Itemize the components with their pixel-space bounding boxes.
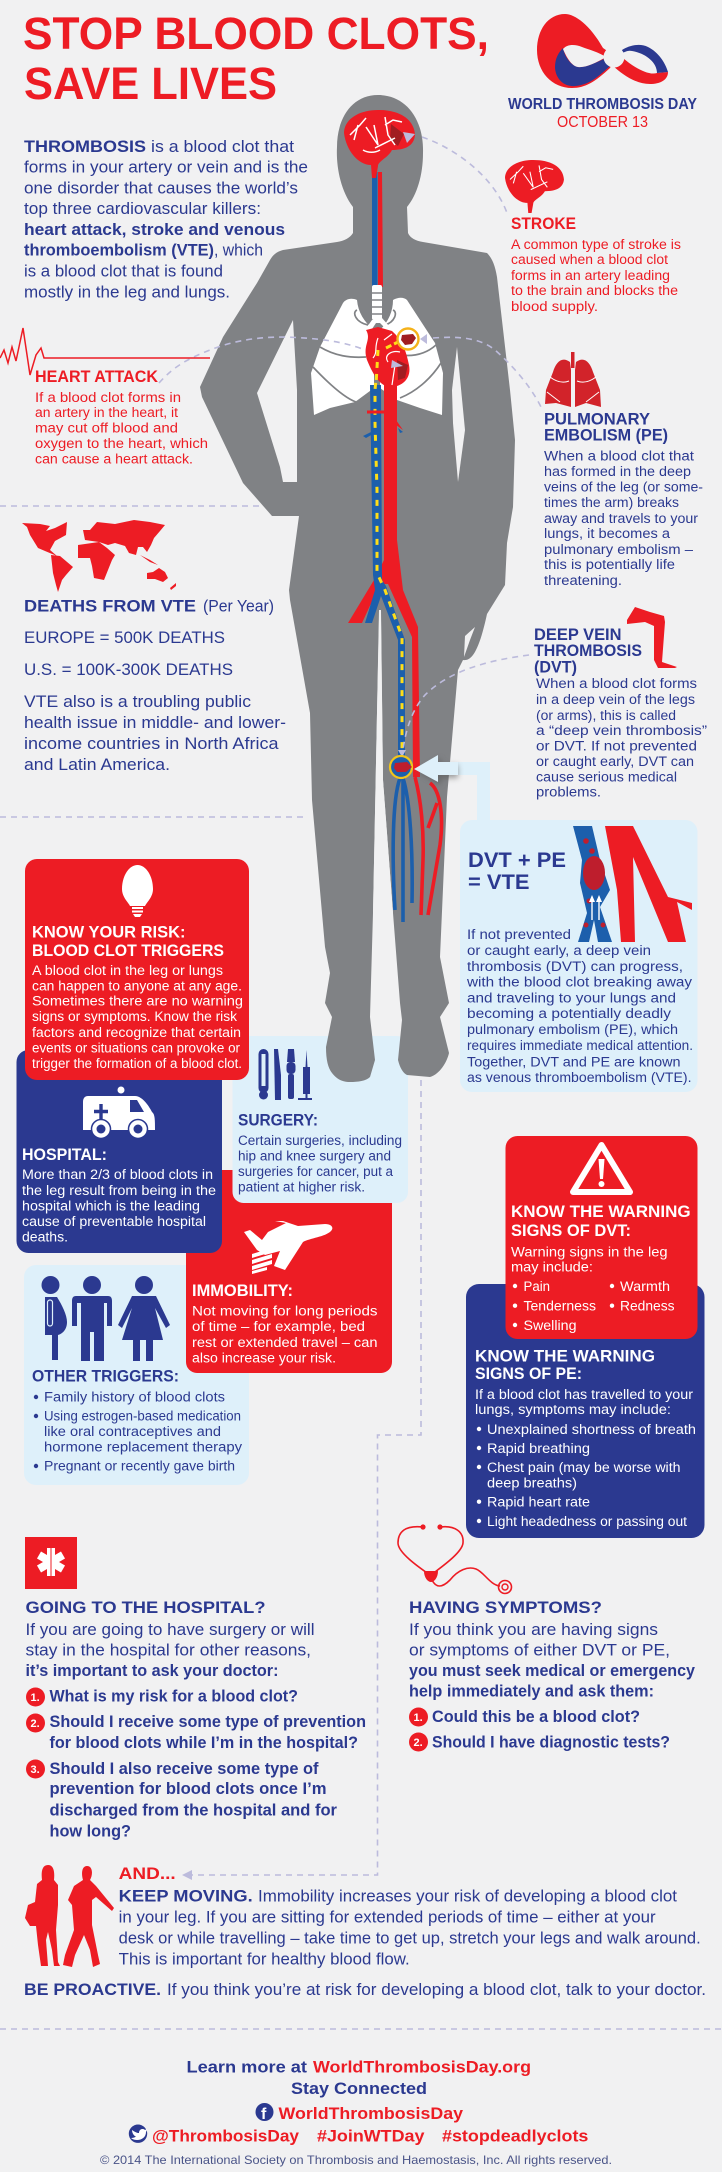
thrombosis intro text: forms in your artery or vein and is the: [24, 159, 308, 177]
having symptoms text: [409, 1599, 696, 1752]
going to the hospital text: stay in the hospital for other reasons,: [26, 1642, 311, 1660]
lungs: [311, 298, 443, 415]
vein and artery illustration: [573, 826, 692, 942]
panel: DVT + PE = VTE: becoming a potentially deadly: [467, 1006, 672, 1022]
thrombosis intro text: mostly in the leg and lungs.: [24, 283, 230, 301]
panel: surgery: Certain surgeries, including: [238, 1133, 402, 1149]
trachea: [367, 285, 389, 329]
stroke text: forms in an artery leading: [511, 268, 670, 284]
icon: stethoscope: [398, 1524, 512, 1594]
symptom questions: Could this be a blood clot?: [432, 1708, 640, 1726]
icon: airplane: [244, 1221, 332, 1274]
going to the hospital text: GOING TO THE HOSPITAL?: [26, 1599, 266, 1617]
panel: DVT + PE = VTE: [414, 755, 698, 1092]
icon: surgical tools: [258, 1049, 312, 1100]
icon: facebook: f: [261, 2106, 267, 2123]
stroke text: blood supply.: [511, 299, 598, 315]
panel: warning signs of PE: deep breaths): [487, 1476, 577, 1492]
panel: warning signs of PE: [466, 1284, 704, 1538]
panel: DVT + PE = VTE: as venous thromboembolism (VTE).: [467, 1070, 692, 1086]
symptom questions: Should I have diagnostic tests?: [432, 1734, 670, 1752]
heart: [366, 327, 409, 387]
thrombosis intro text: THROMBOSIS: [24, 138, 146, 156]
panel: surgery: surgeries for cancer, put a: [238, 1164, 393, 1180]
heart attack text: can cause a heart attack.: [35, 452, 193, 468]
pulmonary embolism text: threatening.: [544, 573, 622, 589]
keep moving text: AND...: [119, 1865, 176, 1883]
question list: for blood clots while I’m in the hospital?: [50, 1734, 358, 1752]
panel: DVT + PE = VTE: If not prevented: [467, 927, 571, 943]
panel: know your risk: can happen to anyone at any age.: [32, 979, 242, 995]
panel: warning signs of DVT: Tenderness: [524, 1299, 596, 1315]
symptom questions: [409, 1708, 670, 1752]
panel: know your risk: KNOW YOUR RISK:: [32, 924, 186, 942]
footer: [129, 2057, 588, 2146]
stroke text: [511, 215, 681, 315]
icon: lungs: [545, 352, 601, 407]
deaths from VTE text: income countries in North Africa: [24, 735, 279, 753]
panel: know your risk: A blood clot in the leg or lungs: [32, 963, 223, 979]
icon: medical star: [25, 1537, 77, 1589]
thrombosis intro text: one disorder that causes the world’s: [24, 179, 298, 197]
heart attack text: HEART ATTACK: [35, 368, 158, 386]
panel: know your risk: events or situations can provoke or: [32, 1041, 240, 1057]
footer: @ThrombosisDay: [152, 2127, 300, 2146]
panel: warning signs of DVT: Swelling: [524, 1318, 576, 1334]
deep vein thrombosis text: problems.: [536, 785, 601, 801]
icon: world map: [22, 520, 176, 592]
panel: warning signs of PE: Rapid heart rate: [487, 1495, 590, 1511]
title: SAVE LIVES: [24, 58, 277, 109]
panel: warning signs of PE: If a blood clot has travelled to your: [475, 1387, 693, 1403]
panel: other triggers: like oral contraceptives and: [44, 1424, 221, 1440]
logo: World Thrombosis Day: OCTOBER 13: [557, 114, 648, 131]
panel: warning signs of DVT: SIGNS OF DVT:: [511, 1222, 631, 1240]
pulmonary embolism text: lungs, it becomes a: [544, 526, 670, 542]
deaths from VTE text: EUROPE = 500K DEATHS: [24, 629, 225, 647]
icon: walking people: [25, 1865, 114, 1967]
keep moving text: in your leg. If you are sitting for extended periods of time – either at your: [119, 1909, 656, 1927]
title: STOP BLOOD CLOTS,: [23, 8, 489, 59]
pulmonary embolism text: veins of the leg (or some-: [544, 480, 703, 496]
panel: know your risk: Sometimes there are no warning: [32, 994, 243, 1010]
panel: warning signs of DVT: may include:: [511, 1260, 593, 1276]
deaths from VTE text: health issue in middle- and lower-: [24, 714, 286, 732]
deep vein thrombosis text: DEEP VEIN: [534, 626, 622, 644]
panel: DVT + PE = VTE: = VTE: [468, 870, 530, 894]
panel: know your risk: signs or symptoms. Know the risk: [32, 1009, 238, 1025]
footer: WorldThrombosisDay.org: [313, 2057, 531, 2076]
panel: surgery: hip and knee surgery and: [238, 1149, 391, 1165]
panel: warning signs of PE: KNOW THE WARNING: [475, 1348, 655, 1366]
title: [23, 8, 489, 109]
deep vein thrombosis text: THROMBOSIS: [534, 642, 642, 660]
panel: DVT + PE = VTE: requires immediate medical attention.: [467, 1038, 693, 1054]
going to the hospital text: [26, 1599, 366, 1841]
panel: warning signs of DVT: Redness: [620, 1299, 674, 1315]
heart attack text: [35, 368, 208, 468]
going to the hospital text: it’s important to ask your doctor:: [26, 1662, 278, 1680]
logo: World Thrombosis Day: WORLD THROMBOSIS DAY: [508, 96, 697, 113]
be proactive text: If you think you’re at risk for developing a blood clot, talk to your doctor.: [167, 1981, 706, 1999]
logo: World Thrombosis Day: [508, 14, 697, 131]
question list: how long?: [50, 1823, 131, 1841]
panel: immobility: Not moving for long periods: [192, 1304, 378, 1320]
deaths from VTE text: [24, 598, 286, 774]
panel: DVT + PE = VTE: pulmonary embolism (PE), which: [467, 1022, 678, 1038]
deep vein thrombosis text: (DVT): [534, 659, 577, 677]
deep vein thrombosis text: (or arms), this is called: [536, 708, 676, 724]
thrombosis intro text: is a blood clot that is found: [24, 262, 223, 280]
heart attack text: If a blood clot forms in: [35, 390, 181, 406]
question list: What is my risk for a blood clot?: [50, 1688, 298, 1706]
panel: warning signs of DVT: KNOW THE WARNING: [511, 1203, 691, 1221]
keep moving text: Immobility increases your risk of developing a blood clot: [258, 1888, 677, 1906]
panel: warning signs of PE: Chest pain (may be worse with: [487, 1460, 680, 1476]
symptom questions: 1.: [414, 1712, 423, 1724]
heart attack text: may cut off blood and: [35, 421, 178, 437]
panel: DVT + PE = VTE: DVT + PE: [468, 848, 566, 872]
thrombosis intro text: heart attack, stroke and venous: [24, 221, 285, 239]
panel: hospital: [16, 1050, 222, 1253]
keep moving text: desk or while travelling – take time to get up, stretch your legs and walk around.: [119, 1929, 701, 1947]
icon: stroke brain: [505, 160, 564, 213]
footer: Stay Connected: [291, 2079, 427, 2098]
question list: Should I also receive some type of: [50, 1760, 319, 1778]
panel: surgery: SURGERY:: [238, 1112, 318, 1130]
keep moving text: This is important for healthy blood flow.: [119, 1950, 410, 1968]
having symptoms text: help immediately and ask them:: [409, 1683, 654, 1701]
question list: 2.: [30, 1718, 40, 1730]
arteries and veins: [348, 172, 442, 922]
icon: ECG line: [0, 328, 210, 375]
thrombosis intro text: [24, 138, 308, 301]
thrombosis intro text: , which: [214, 242, 263, 260]
panel: immobility: rest or extended travel – can: [192, 1335, 378, 1351]
question list: prevention for blood clots once I’m: [50, 1780, 326, 1798]
pulmonary embolism text: has formed in the deep: [544, 464, 691, 480]
panel: other triggers: Family history of blood clots: [44, 1390, 225, 1406]
icon: light bulb: [122, 865, 153, 917]
pulmonary embolism text: times the arm) breaks: [544, 495, 679, 511]
panel: warning signs of PE: SIGNS OF PE:: [475, 1365, 582, 1383]
pulmonary embolism text: away and travels to your: [544, 511, 698, 527]
panel: know your risk: [25, 859, 249, 1080]
panel: warning signs of DVT: Warning signs in the leg: [511, 1245, 668, 1261]
deaths from VTE text: DEATHS FROM VTE: [24, 598, 196, 616]
having symptoms text: HAVING SYMPTOMS?: [409, 1599, 602, 1617]
stroke text: A common type of stroke is: [511, 237, 681, 253]
going to the hospital text: If you are going to have surgery or will: [26, 1621, 314, 1639]
thrombosis intro text: is a blood clot that: [151, 138, 294, 156]
deep vein thrombosis text: or DVT. If not prevented: [536, 739, 697, 755]
pulmonary embolism text: PULMONARY: [544, 410, 650, 428]
footer: Learn more at: [186, 2057, 307, 2076]
panel: immobility: of time – for example, bed: [192, 1319, 365, 1335]
thrombosis intro text: top three cardiovascular killers:: [24, 200, 261, 218]
panel: hospital: cause of preventable hospital: [22, 1214, 206, 1230]
deaths from VTE text: U.S. = 100K-300K DEATHS: [24, 661, 233, 679]
question list: discharged from the hospital and for: [50, 1802, 338, 1820]
clot in lung: [398, 328, 427, 350]
heart attack text: oxygen to the heart, which: [35, 436, 208, 452]
footer: #JoinWTDay: [317, 2127, 425, 2146]
icon: facebook: [256, 2103, 274, 2123]
body silhouette: [200, 95, 515, 1082]
pulmonary embolism text: EMBOLISM (PE): [544, 427, 668, 445]
deep vein thrombosis text: cause serious medical: [536, 770, 677, 786]
pulmonary embolism text: this is potentially life: [544, 557, 675, 573]
thrombosis intro text: thromboembolism (VTE): [24, 242, 214, 260]
deep vein thrombosis text: a “deep vein thrombosis”: [536, 723, 707, 739]
panel: DVT + PE = VTE: Together, DVT and PE are known: [467, 1055, 680, 1071]
deaths from VTE text: (Per Year): [203, 598, 274, 616]
footer: WorldThrombosisDay: [278, 2104, 464, 2123]
symptom questions: 2.: [414, 1737, 423, 1749]
panel: surgery: [232, 1036, 408, 1203]
question list: 1.: [30, 1692, 40, 1704]
footer: #stopdeadlyclots: [442, 2127, 588, 2146]
question list: [26, 1688, 366, 1841]
arrow: to keep moving: [182, 1870, 192, 1880]
icon: people: [42, 1276, 170, 1361]
copyright: © 2014 The International Society on Thrombosis and Haemostasis, Inc. All rights reserved.: [100, 2153, 612, 2167]
panel: immobility: also increase your risk.: [192, 1351, 336, 1367]
icon: ambulance: [83, 1086, 155, 1138]
panel: other triggers: Using estrogen-based medication: [44, 1409, 241, 1425]
panel: other triggers: hormone replacement therapy: [44, 1440, 243, 1456]
panel: DVT + PE = VTE: and traveling to your lungs and: [467, 991, 676, 1007]
stroke text: to the brain and blocks the: [511, 283, 678, 299]
panel: surgery: patient at higher risk.: [238, 1180, 365, 1196]
deaths from VTE text: VTE also is a troubling public: [24, 693, 251, 711]
panel: warning signs of PE: lungs, symptoms may include:: [475, 1402, 671, 1418]
panel: warning signs of DVT: Warmth: [620, 1279, 670, 1295]
panel: warning signs of DVT: [506, 1136, 698, 1339]
keep moving text: KEEP MOVING.: [119, 1888, 253, 1906]
having symptoms text: If you think you are having signs: [409, 1621, 658, 1639]
deep vein thrombosis text: in a deep vein of the legs: [536, 692, 695, 708]
panel: hospital: deaths.: [22, 1230, 68, 1246]
pulmonary embolism text: When a blood clot that: [544, 449, 694, 465]
stroke text: caused when a blood clot: [511, 252, 668, 268]
keep moving text: [119, 1865, 701, 1968]
panel: other triggers: [24, 1265, 249, 1485]
panel: warning signs of PE: Rapid breathing: [487, 1441, 590, 1457]
heart attack text: an artery in the heart, it: [35, 405, 178, 421]
deep vein thrombosis text: [534, 626, 707, 801]
brain: [344, 110, 415, 178]
deep vein thrombosis text: When a blood clot forms: [536, 676, 697, 692]
pulmonary embolism text: pulmonary embolism –: [544, 542, 693, 558]
panel: DVT + PE = VTE: thrombosis (DVT) can progress,: [467, 959, 683, 975]
panel: know your risk: trigger the formation of a blood clot.: [32, 1056, 242, 1072]
panel: know your risk: BLOOD CLOT TRIGGERS: [32, 942, 224, 960]
panel: warning signs of PE: Light headedness or passing out: [487, 1514, 687, 1530]
icon: warning triangle: [573, 1145, 630, 1192]
pulmonary embolism text: [544, 410, 703, 589]
panel: know your risk: factors and recognize that certain: [32, 1025, 241, 1041]
panel: hospital: HOSPITAL:: [22, 1146, 107, 1164]
panel: other triggers: Pregnant or recently gave birth: [44, 1459, 235, 1475]
panel: DVT + PE = VTE: with the blood clot breaking away: [466, 975, 693, 991]
be proactive text: BE PROACTIVE.: [24, 1981, 161, 1999]
panel: warning signs of DVT: Pain: [524, 1279, 550, 1295]
having symptoms text: you must seek medical or emergency: [409, 1662, 696, 1680]
panel: hospital: hospital which is the leading: [22, 1199, 200, 1215]
stroke text: STROKE: [511, 215, 576, 233]
question list: 3.: [30, 1764, 40, 1776]
panel: immobility: IMMOBILITY:: [192, 1282, 293, 1300]
deep vein thrombosis text: or caught early, DVT can: [536, 754, 694, 770]
clot in leg: [390, 750, 412, 778]
icon: leg: [627, 607, 677, 668]
deaths from VTE text: and Latin America.: [24, 756, 170, 774]
panel: warning signs of PE: Unexplained shortness of breath: [487, 1422, 696, 1438]
icon: twitter: [129, 2124, 147, 2143]
panel: DVT + PE = VTE: or caught early, a deep vein: [467, 943, 651, 959]
panel: hospital: the leg result from being in the: [22, 1183, 216, 1199]
having symptoms text: or symptoms of either DVT or PE,: [409, 1642, 670, 1660]
panel: other triggers: OTHER TRIGGERS:: [32, 1368, 179, 1386]
panel: hospital: More than 2/3 of blood clots in: [22, 1167, 213, 1183]
question list: Should I receive some type of prevention: [50, 1713, 366, 1731]
panel: immobility: [186, 1170, 392, 1373]
